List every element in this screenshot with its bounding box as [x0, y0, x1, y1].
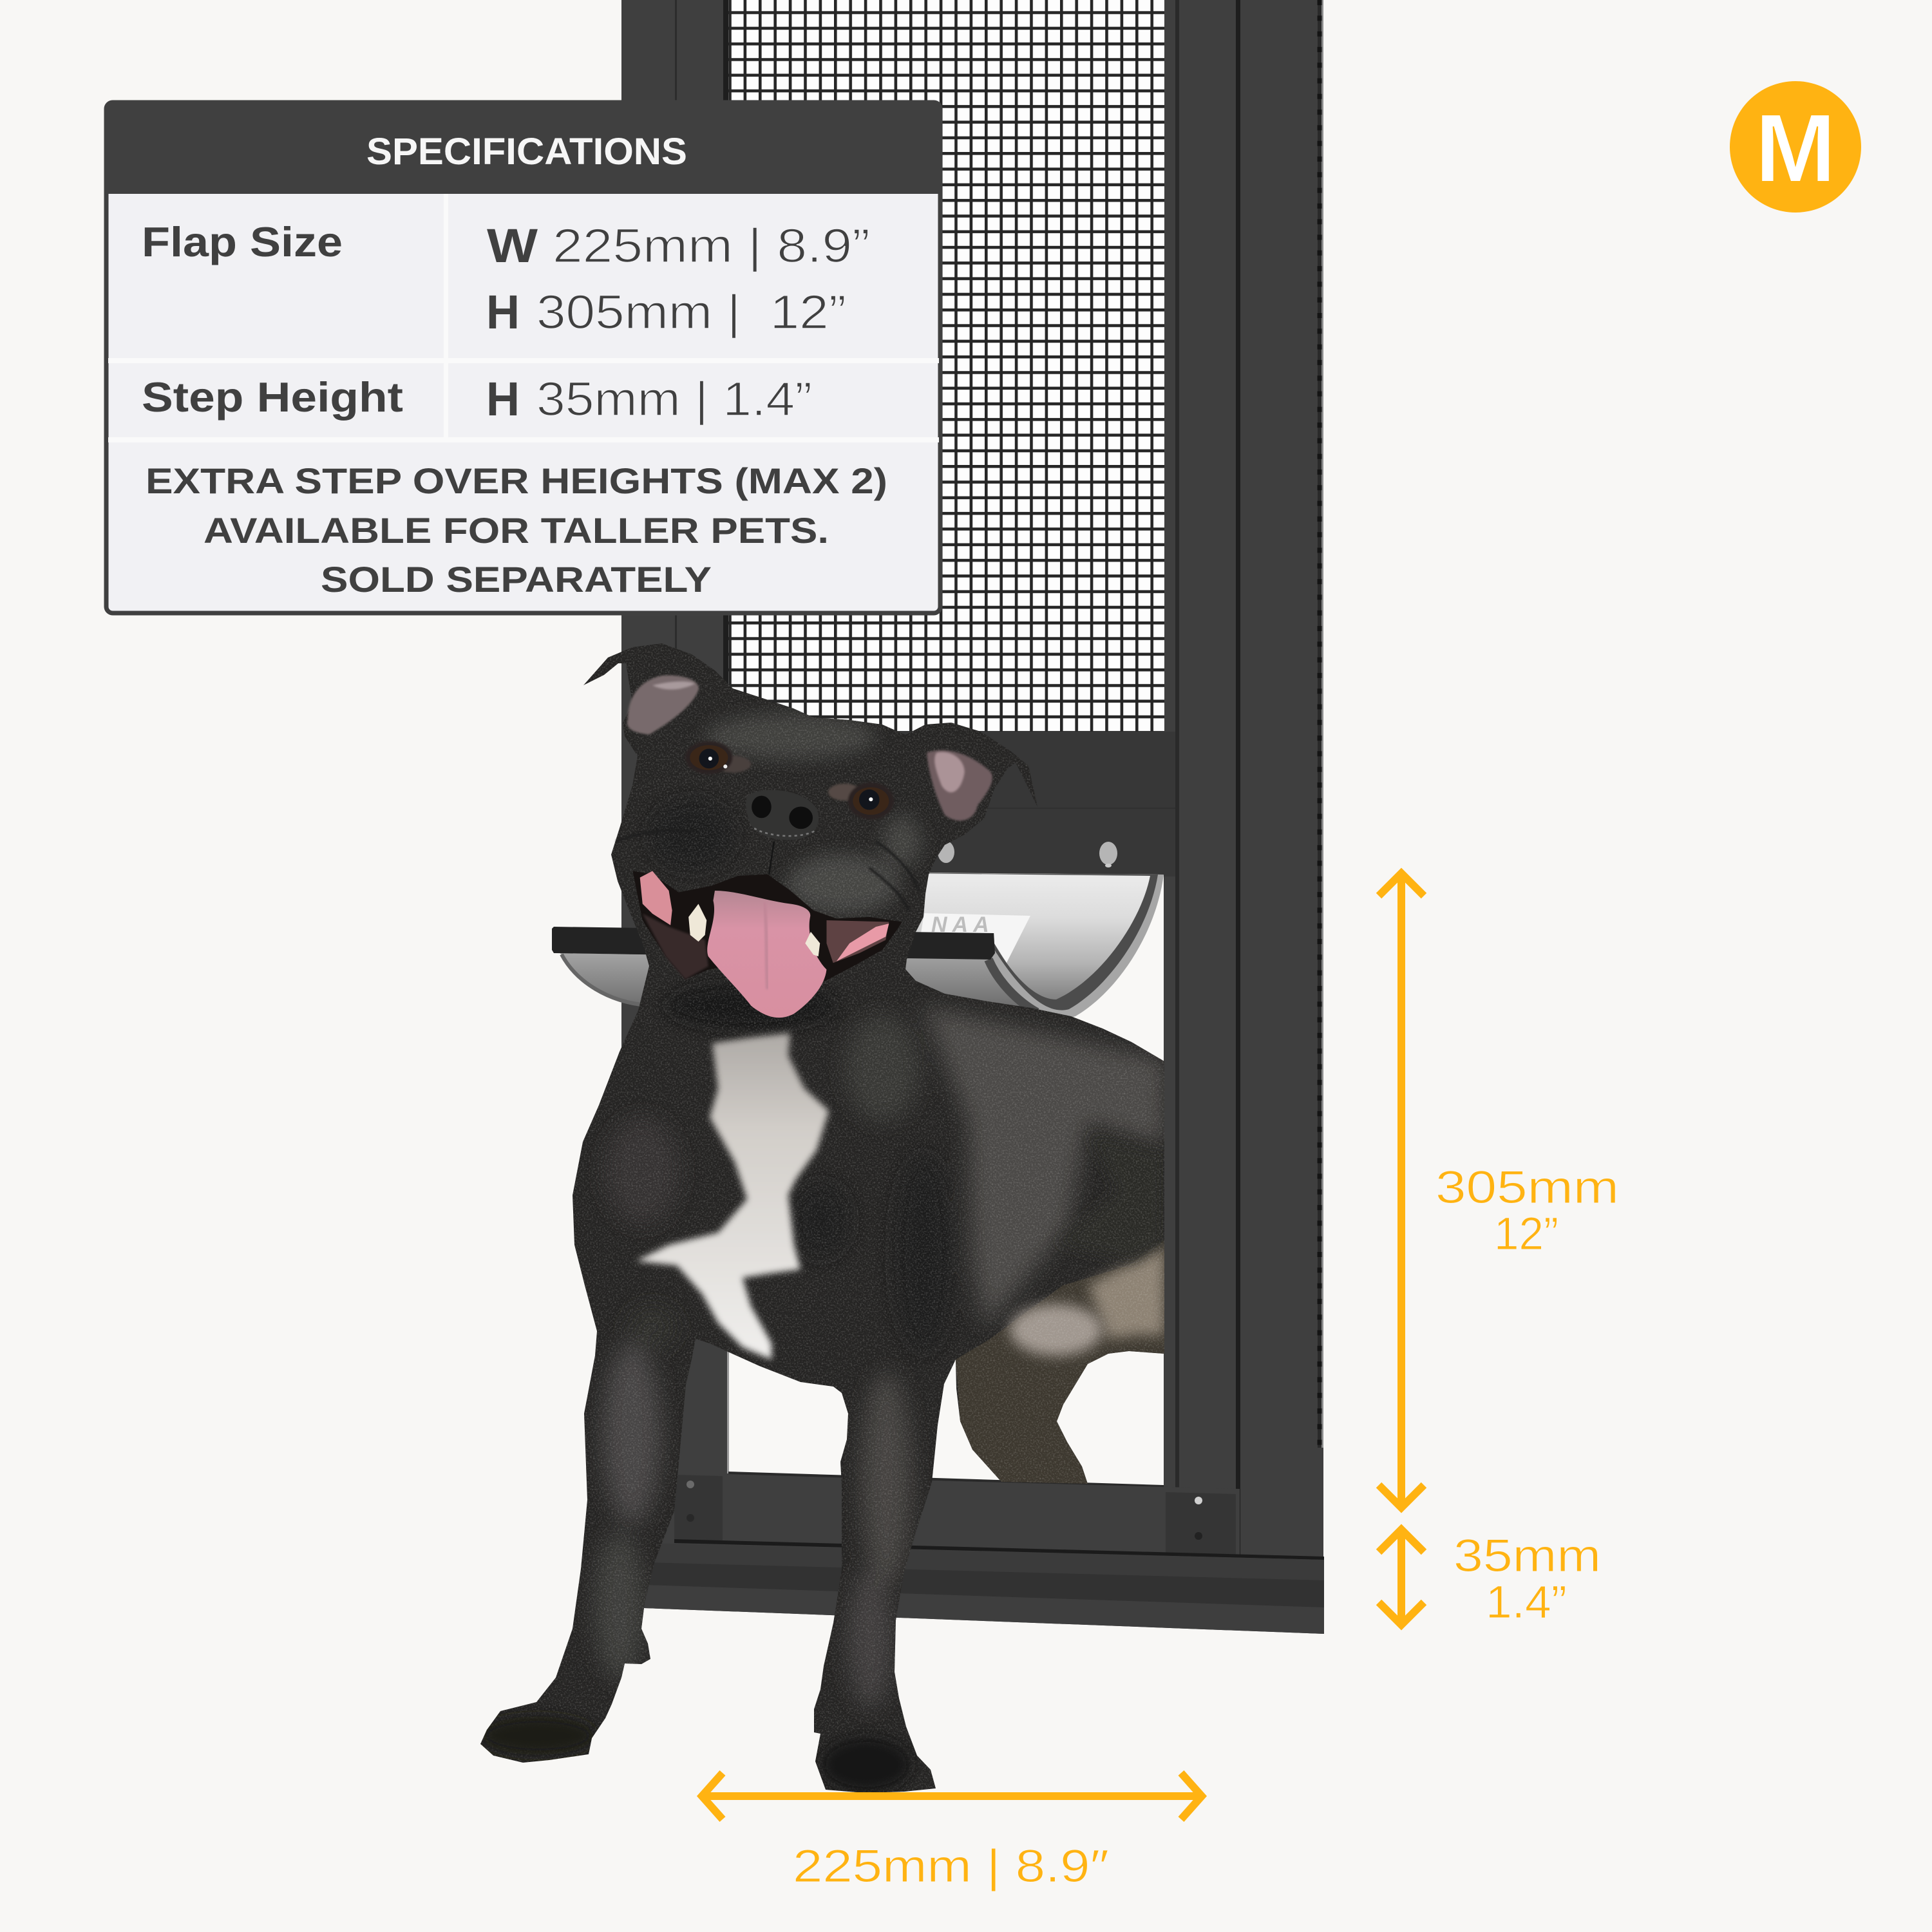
table title: SPECIFICATIONS: [366, 131, 687, 173]
door right edge weatherstrip: [1318, 0, 1323, 1448]
flap front rim: [989, 960, 1037, 1012]
flap height value: 305mm | 12”: [536, 285, 846, 339]
table header: [104, 100, 942, 194]
tan belly: [1088, 1245, 1164, 1339]
table note: SOLD SEPARATELY: [321, 559, 712, 600]
dog: [477, 638, 1172, 1803]
label: flap height: 305mm: [1435, 1162, 1619, 1213]
forehead and muzzle shading: [649, 714, 922, 1028]
flap rear rim: [837, 873, 1158, 1010]
step height value: H: [486, 372, 520, 426]
flap screws: [938, 841, 1117, 867]
nose: [746, 790, 819, 875]
table note: [146, 460, 887, 600]
flap height value: H: [486, 285, 520, 339]
fur texture: [477, 638, 1172, 1803]
white chest: [636, 1033, 829, 1359]
table note: EXTRA STEP OVER HEIGHTS (MAX 2): [146, 460, 887, 501]
arrow: flap height: [1379, 873, 1424, 1508]
flap bar: [552, 927, 995, 960]
eye socket patches: [685, 741, 894, 819]
label: flap width: 225mm | 8.9″: [793, 1841, 1109, 1892]
flap label text: NAA: [931, 913, 994, 937]
left eye: [690, 745, 728, 770]
rail shadow: [674, 1539, 1324, 1560]
flap size label: Flap Size: [142, 218, 343, 265]
size letter: M: [1755, 93, 1836, 202]
opening left edge: [727, 960, 729, 1473]
mouth interior: [632, 871, 902, 981]
flap front panel: [560, 953, 1043, 1016]
label: step height: [1454, 1531, 1601, 1628]
flap left rim: [562, 954, 647, 1005]
paws: [480, 1716, 911, 1792]
dog body and fur: [477, 638, 1172, 1803]
step height label: Step Height: [142, 374, 403, 421]
size badge: [1730, 81, 1861, 213]
left ear inner: [627, 675, 699, 735]
label: flap height: 12”: [1494, 1209, 1558, 1260]
step height value: 35mm | 1.4”: [536, 372, 812, 426]
door frame with mesh and pet flap: [552, 0, 1324, 1634]
mesh left edge: [723, 0, 728, 732]
face details: [616, 675, 992, 1018]
flap label: [921, 913, 1030, 963]
flap width value: W: [487, 219, 538, 272]
wrinkles: [616, 830, 918, 911]
opening bottom edge: [728, 1472, 1164, 1488]
door body: [621, 0, 1323, 1567]
left tooth: [688, 904, 706, 942]
lower rail: [674, 1473, 1240, 1555]
frame lines: [675, 0, 1240, 1555]
right ear inner: [927, 750, 992, 820]
flank shadow: [1081, 1148, 1164, 1270]
label: step height: 35mm: [1454, 1531, 1601, 1582]
left ear highlight: [652, 681, 695, 690]
door sill: [644, 1543, 1324, 1634]
right mouth interior: [826, 920, 889, 963]
pale thigh: [1010, 1304, 1103, 1356]
right ear highlight: [934, 752, 965, 792]
fur shading: [595, 1007, 1164, 1709]
tongue: [707, 891, 826, 1018]
left bracket: [674, 1475, 723, 1541]
screws: [687, 1481, 1202, 1540]
right lip: [837, 923, 889, 961]
panel below mesh: [723, 732, 1175, 876]
mesh screen: [724, 0, 1164, 732]
label: flap height: [1435, 1162, 1619, 1260]
left lip: [640, 871, 672, 925]
panel seam: [902, 808, 1175, 809]
hind quarter: [956, 1240, 1164, 1484]
arrow: flap width: [702, 1773, 1202, 1819]
flap opening: [728, 871, 1164, 1487]
arrow: step height: [1379, 1530, 1424, 1625]
tongue groove: [764, 902, 768, 989]
table note: AVAILABLE FOR TALLER PETS.: [204, 510, 829, 551]
table dividers: [108, 194, 939, 442]
flap width value: 225mm | 8.9”: [553, 219, 870, 272]
right bracket: [1166, 1492, 1236, 1555]
flap rear outer rim: [837, 873, 1164, 1018]
right tooth: [805, 932, 820, 956]
table panel: [106, 102, 940, 613]
label: step height: 1.4”: [1486, 1577, 1567, 1628]
flap rear panel: [837, 873, 1150, 999]
right eye: [853, 787, 889, 815]
specifications table: [104, 100, 942, 613]
lower left lip: [643, 914, 708, 980]
